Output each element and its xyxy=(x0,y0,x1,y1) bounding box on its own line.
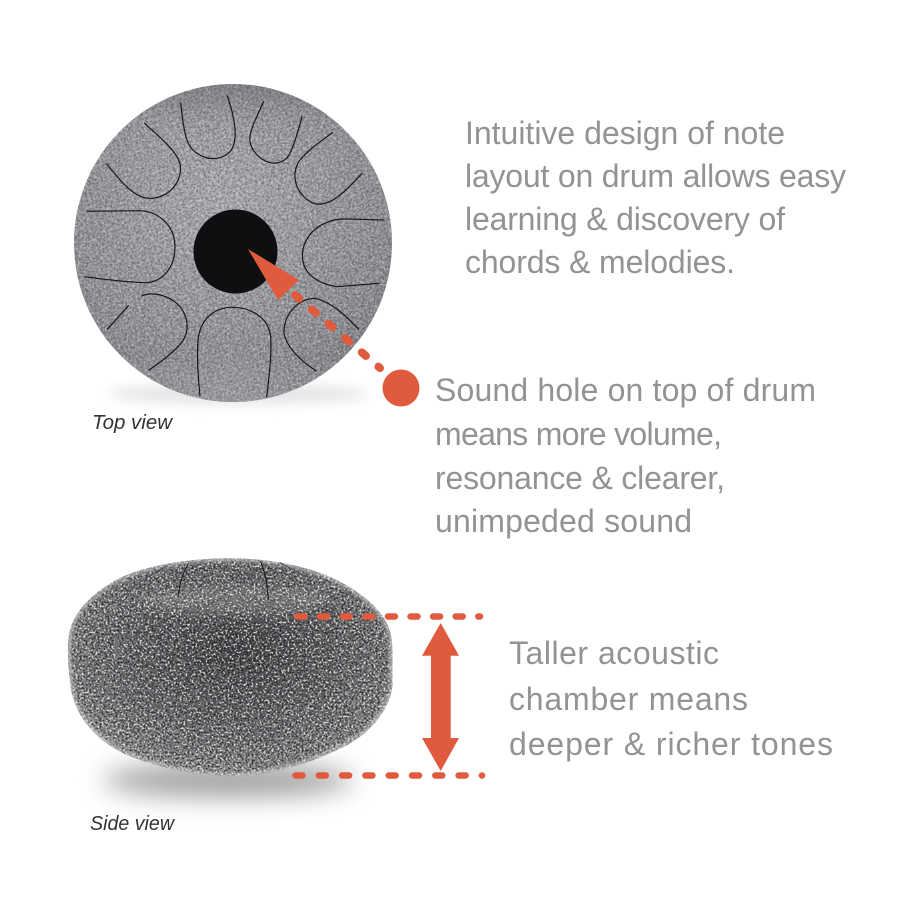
text: taller chamber: deeper & richer tones xyxy=(509,726,833,762)
text: sound hole: means more volume, xyxy=(435,416,722,452)
caption: side view: Side view xyxy=(90,813,176,835)
sound hole xyxy=(194,210,278,294)
image: top view of drum xyxy=(70,80,400,410)
text: intuitive design: learning & discovery of xyxy=(465,201,785,237)
text: intuitive design: layout on drum allows easy xyxy=(465,158,846,194)
text: sound hole: unimpeded sound xyxy=(435,503,692,539)
arrow: chamber height xyxy=(296,616,482,776)
note tongues xyxy=(85,96,383,397)
text: sound hole xyxy=(435,372,816,539)
arrow: pointer to sound hole xyxy=(248,249,420,406)
text: taller chamber xyxy=(509,635,833,762)
text: taller chamber: chamber means xyxy=(509,681,748,717)
text: intuitive design xyxy=(465,115,846,280)
caption: top view: Top view xyxy=(92,412,174,434)
text: intuitive design: chords & melodies. xyxy=(465,244,735,280)
image: side view of drum xyxy=(60,550,400,797)
text: intuitive design: Intuitive design of note xyxy=(465,115,785,151)
text: taller chamber: Taller acoustic xyxy=(509,635,719,671)
tongue edges on side view xyxy=(116,562,308,603)
text: sound hole: resonance & clearer, xyxy=(435,460,725,496)
text: sound hole: Sound hole on top of drum xyxy=(435,372,816,408)
